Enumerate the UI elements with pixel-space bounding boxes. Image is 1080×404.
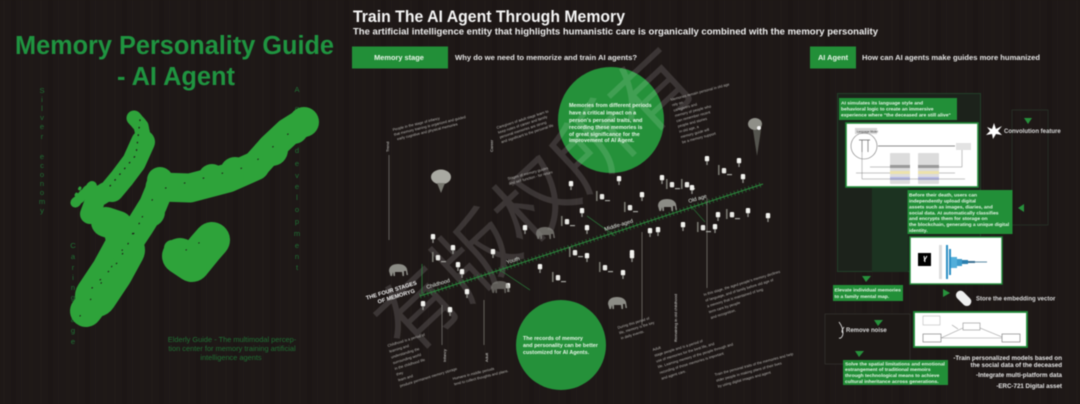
label: simulates language: experience where "the deceased are still alive" — [841, 112, 951, 118]
main title: - AI Agent — [117, 63, 236, 91]
list: training notes: the social data of the deceased — [971, 362, 1062, 369]
label: elevate memories: Elevate individual memories — [834, 288, 901, 294]
note: remaining: recording of those memories is important — [659, 352, 724, 375]
arrow: down to solve — [855, 351, 864, 357]
circle text bottom: and personality can be better — [523, 343, 599, 349]
note: childhood: Childhood is a period of — [387, 333, 426, 348]
vertical stage labels: Career — [489, 139, 494, 152]
note: childhood: learn and — [398, 374, 414, 382]
vertical label: caring age: n — [71, 283, 75, 292]
vertical label: agent development: A — [294, 85, 300, 94]
stage labels: Middle-aged — [604, 218, 634, 233]
icon: convolution star — [986, 123, 1002, 139]
circle text bottom: The records of memory — [523, 336, 583, 342]
flow backdrop — [825, 94, 1048, 364]
vertical label: agent development: n — [295, 252, 299, 261]
label: simulates language: behavioral logic to create an immersive — [841, 106, 934, 112]
question: why memorize: Why do we need to memorize and train AI agents? — [455, 53, 637, 62]
note: old age: memory guide will — [680, 128, 710, 139]
diagram: architecture: Language Model — [857, 130, 878, 134]
vertical label: agent development — [294, 85, 300, 272]
arrow: left — [1018, 204, 1024, 212]
list: training notes — [953, 355, 1063, 390]
vertical label: silver economy: n — [40, 179, 44, 188]
vertical label: silver economy: r — [41, 132, 44, 141]
note: infancy stage: People in the stage of infancy — [392, 116, 440, 132]
dna lumps — [135, 107, 319, 227]
vertical label: silver economy — [39, 86, 45, 215]
caption: elderly guide: intelligence agents — [200, 353, 262, 362]
note: career: Caregivers of adult stage learn to — [496, 109, 549, 130]
label: simulates language — [839, 98, 957, 120]
vertical label: agent development: o — [295, 205, 299, 214]
note: career: keep notes of career and family — [498, 115, 548, 135]
vertical label: agent development: e — [295, 159, 299, 168]
panel: timeline of memory — [359, 33, 797, 390]
vertical label: agent development: e — [295, 241, 299, 250]
vertical label: agent development: v — [295, 171, 299, 180]
stage labels: OF MEMORYG — [377, 289, 416, 306]
label: upload data: independently upload digital — [909, 198, 977, 204]
note: old age detail: a memory that is maintained of long — [707, 288, 764, 308]
icon: capsule — [954, 289, 973, 308]
diagram: embedding — [910, 237, 1002, 284]
note: remaining: life. Learning memory of the people through and — [657, 342, 734, 369]
note: adult: Humans in middle periods — [452, 367, 495, 381]
note: old age: be a memory support — [682, 132, 716, 144]
note: childhood: they — [396, 371, 404, 377]
vertical label: agent development: m — [294, 229, 300, 238]
button: memory stage: Memory stage — [374, 53, 424, 62]
figures along the timeline — [421, 156, 770, 316]
label: elevate memories — [833, 285, 903, 301]
label: convolution feature: Convolution feature — [1004, 129, 1061, 135]
subheading: The artificial intelligence entity that highlights humanistic care is organically combined with the memory personality — [353, 26, 879, 38]
vertical label: silver economy: l — [41, 104, 43, 113]
vertical label: agent development: e — [295, 182, 299, 191]
caption: elderly guide — [168, 335, 297, 362]
note: remaining: Adult — [652, 346, 661, 352]
label: solve limitations: Solve the spatial limitations and emotional — [845, 362, 945, 368]
vertical label: caring age — [70, 241, 76, 346]
vertical label: silver economy: y — [40, 206, 44, 215]
vertical label: caring age: a — [71, 315, 76, 324]
note: childhood: learning and — [389, 344, 409, 354]
leader lines — [389, 155, 707, 345]
note: youth: Stages of memory guides — [507, 166, 549, 181]
vertical stage labels: Remaining in old childhood — [673, 294, 678, 342]
note: middle aged: in daily events. — [620, 330, 645, 340]
circle text top: have a critical impact on a — [569, 110, 637, 116]
label: upload data: Before their death, users can — [909, 192, 977, 198]
timeline axis — [420, 184, 763, 296]
note: old age detail: In this stage, the aged people's memory declines — [703, 270, 781, 297]
note: bottom right: by using digital images and agent — [717, 371, 771, 389]
vertical label: caring age: a — [71, 252, 76, 261]
note: old age: rely on — [672, 101, 683, 107]
stage labels: Old age — [688, 194, 708, 205]
label: upload data: the blockchain, generating a unique digital — [909, 222, 1010, 228]
arrow: down to remove noise — [874, 320, 883, 326]
circle text bottom: customized for AI Agents. — [523, 350, 590, 356]
note: old age detail: of language, and of family before old age of — [705, 278, 775, 303]
vertical stage labels: Trend — [385, 142, 390, 152]
icon: balloon right — [748, 118, 762, 156]
note: childhood: in the childhood life — [394, 358, 426, 371]
panel: memory personality guide — [15, 32, 334, 362]
note: middle aged: During this period of — [617, 316, 651, 330]
vertical stage labels: Infancy — [442, 349, 447, 362]
label: simulates language: AI simulates its language style and — [841, 100, 923, 106]
vertical label: caring age: g — [71, 326, 75, 335]
vertical label: agent development: l — [296, 193, 298, 202]
vertical label: caring age: i — [72, 273, 74, 282]
note: youth: and self function - for return — [509, 170, 553, 186]
stage labels: Youth — [506, 256, 521, 266]
circle text top: of great significance for the — [569, 132, 640, 138]
icon: balloon left — [431, 170, 451, 193]
vertical stage labels — [385, 139, 678, 362]
elephants — [389, 199, 677, 309]
label: upload data: assets such as images, diaries, and — [909, 204, 993, 210]
vertical label: caring age: r — [72, 263, 75, 272]
vertical label: silver economy: v — [40, 113, 44, 122]
vertical label: agent development: g — [295, 104, 299, 113]
vertical label: caring age: e — [71, 337, 75, 346]
vertical label: agent development: p — [295, 217, 299, 226]
note: infancy stage: that memory training is organized and guided — [393, 115, 466, 137]
note: childhood: surrounding world — [392, 353, 422, 365]
green circle top — [558, 67, 664, 173]
label: upload data: identity. — [909, 228, 928, 234]
note: bottom right: Train the personal traits of the memories and help — [714, 352, 794, 377]
label: upload data — [908, 190, 1012, 234]
vertical label: silver economy: o — [40, 170, 44, 179]
label: elevate memories: to a family mental map. — [834, 294, 890, 300]
note: childhood: understanding the — [391, 347, 420, 359]
note: bottom right: older people in making plans of their lives — [716, 361, 782, 383]
note: old age detail: and recognition. — [710, 308, 736, 320]
vertical label: silver economy: S — [39, 86, 45, 95]
note: old age: caregivers and — [673, 102, 697, 113]
vertical label: silver economy: e — [40, 152, 44, 161]
button: ai agent — [810, 46, 856, 68]
note: old age: Memories remain personal in old age — [670, 82, 730, 102]
label: remove noise: Remove noise — [846, 328, 887, 334]
circle text top: recording these memories is — [569, 125, 642, 131]
note: adult: tend to collect thoughts and plans. — [454, 369, 509, 386]
vertical label: agent development: d — [295, 146, 299, 155]
panel: ai agent flow — [825, 94, 1063, 390]
arrow: down right — [1024, 118, 1032, 124]
arrow: down to elevate — [862, 276, 871, 282]
note: old age: people and stories — [677, 117, 708, 129]
vertical label: caring age: C — [70, 241, 76, 250]
caption: elderly guide: Elderly Guide - The multimodal percep- — [168, 335, 297, 344]
note: remaining: stage people and is a period of — [654, 339, 704, 358]
heading: train the ai agent: Train The AI Agent Through Memory — [353, 7, 626, 26]
stage labels: Childhood — [426, 278, 451, 291]
dna chromosome shape — [72, 118, 304, 311]
vertical stage labels: Adult — [484, 352, 489, 362]
label: solve limitations — [843, 360, 948, 385]
stage labels: THE FOUR STAGES — [365, 281, 418, 302]
vertical label: silver economy: c — [40, 161, 44, 170]
vertical label: silver economy: m — [39, 197, 45, 206]
note: remaining: and agent care. — [661, 369, 687, 381]
button: ai agent: AI Agent — [818, 53, 849, 62]
note: career: personal memories are strong — [499, 121, 547, 139]
note: middle aged: life, memory is the key — [619, 321, 655, 335]
vertical label: silver economy: i — [41, 95, 43, 104]
note: old age: in old age, a — [679, 125, 700, 134]
vertical label: silver economy: e — [40, 122, 44, 131]
label: upload data: social data. AI automatically classifies — [909, 210, 999, 216]
green circle bottom — [516, 300, 606, 390]
note: old age detail: term care by people — [708, 301, 741, 314]
note: childhood: produce permanent memory storage — [399, 367, 458, 388]
question: humanized guides: How can AI agents make guides more humanized — [862, 53, 1040, 62]
circle text top: person's personal traits, and — [569, 118, 642, 124]
main title — [15, 32, 334, 91]
note: old age: memory of people who — [674, 104, 712, 118]
arrow: right to capsule — [943, 289, 950, 297]
button: memory stage — [352, 46, 448, 68]
diagram: noise flow — [914, 312, 1027, 347]
list: training notes: -ERC-721 Digital asset — [996, 383, 1062, 390]
dna specks — [80, 120, 300, 316]
label: store vector: Store the embedding vector — [976, 296, 1056, 302]
label: solve limitations: through technological means to achieve — [845, 373, 940, 379]
circle text top: Memories from different periods — [569, 103, 652, 109]
vertical label: silver economy: o — [40, 188, 44, 197]
note: remaining: use of memories for the best life, and — [656, 342, 715, 363]
note: infancy stage: early cognitive and physical memories — [397, 122, 458, 141]
icon: remove noise — [839, 322, 844, 338]
vertical label: agent development: t — [296, 263, 299, 272]
caption: elderly guide: tion center for memory training artificial — [168, 344, 296, 353]
diagram: architecture — [846, 123, 978, 187]
main title: Memory Personality Guide — [15, 32, 334, 60]
list: training notes: -Train personalized models based on — [953, 355, 1062, 362]
list: training notes: -Integrate multi-platform data — [976, 372, 1063, 379]
watermark: 有版权所有 — [359, 33, 712, 370]
label: solve limitations: estrangement of traditional memoirs — [845, 367, 931, 373]
note: career: and significant to the personal life — [501, 123, 554, 144]
vertical label: caring age: g — [71, 293, 75, 302]
note: old age: can remember recent — [676, 110, 711, 123]
circle text top — [569, 103, 652, 144]
label: upload data: and encrypts them for storage on — [909, 216, 987, 222]
label: solve limitations: cultural inheritance across generations. — [845, 379, 939, 385]
circle text top: improvement of AI Agent. — [569, 138, 635, 144]
stage labels — [365, 194, 708, 308]
circle text bottom — [523, 336, 599, 356]
